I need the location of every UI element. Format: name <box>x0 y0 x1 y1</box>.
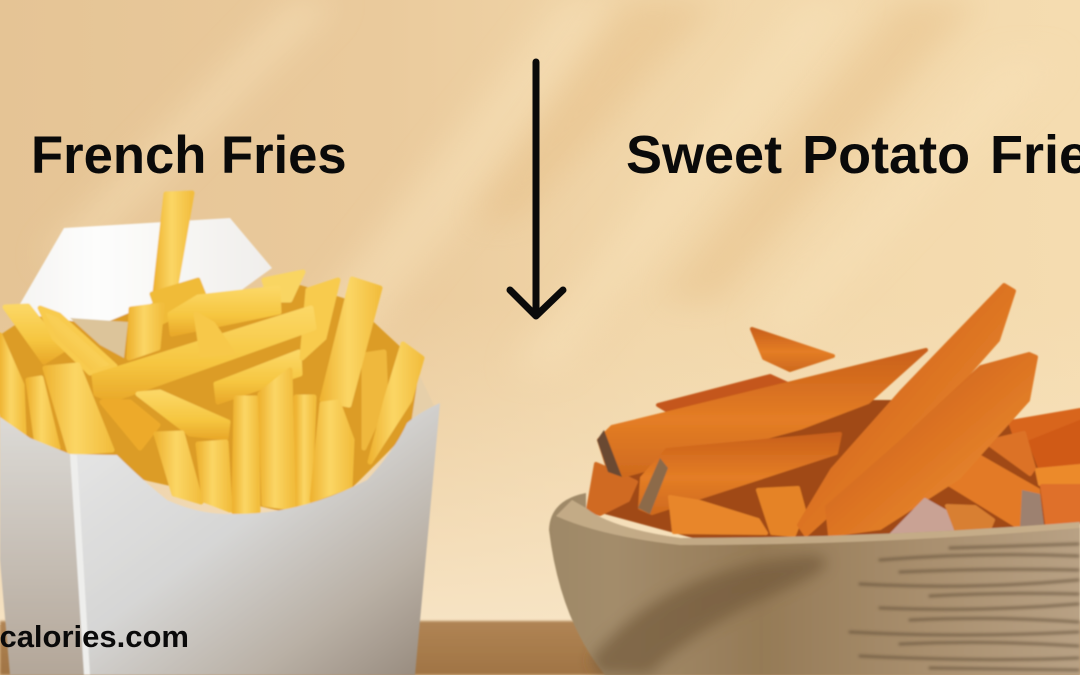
illustration: sweet potato fries in a wooden bowl <box>549 285 1080 675</box>
illustration: French fries in a white box <box>0 193 440 675</box>
table surface <box>0 621 1080 675</box>
box fold <box>70 454 90 675</box>
beige gap inside box <box>70 318 128 358</box>
box inner right wall <box>360 338 434 450</box>
bowl <box>549 493 1080 675</box>
dark mass behind pile <box>590 400 1080 540</box>
box back flap <box>20 218 272 340</box>
icon: arrow pointing down <box>510 62 563 316</box>
inner shadow of pile <box>0 285 420 520</box>
bowl wood shading <box>590 555 827 675</box>
fry cut end <box>638 458 668 514</box>
fries pile <box>0 193 422 512</box>
box left panel <box>0 417 85 675</box>
bowl rim highlight <box>556 500 1080 545</box>
heading: French Fries: French Fries <box>31 126 347 185</box>
source watermark: calories.com <box>0 619 189 654</box>
bowl wood grain <box>850 544 1078 670</box>
sweet potato pile <box>588 285 1080 536</box>
box front panel <box>70 403 440 675</box>
fry cut end <box>597 430 622 477</box>
